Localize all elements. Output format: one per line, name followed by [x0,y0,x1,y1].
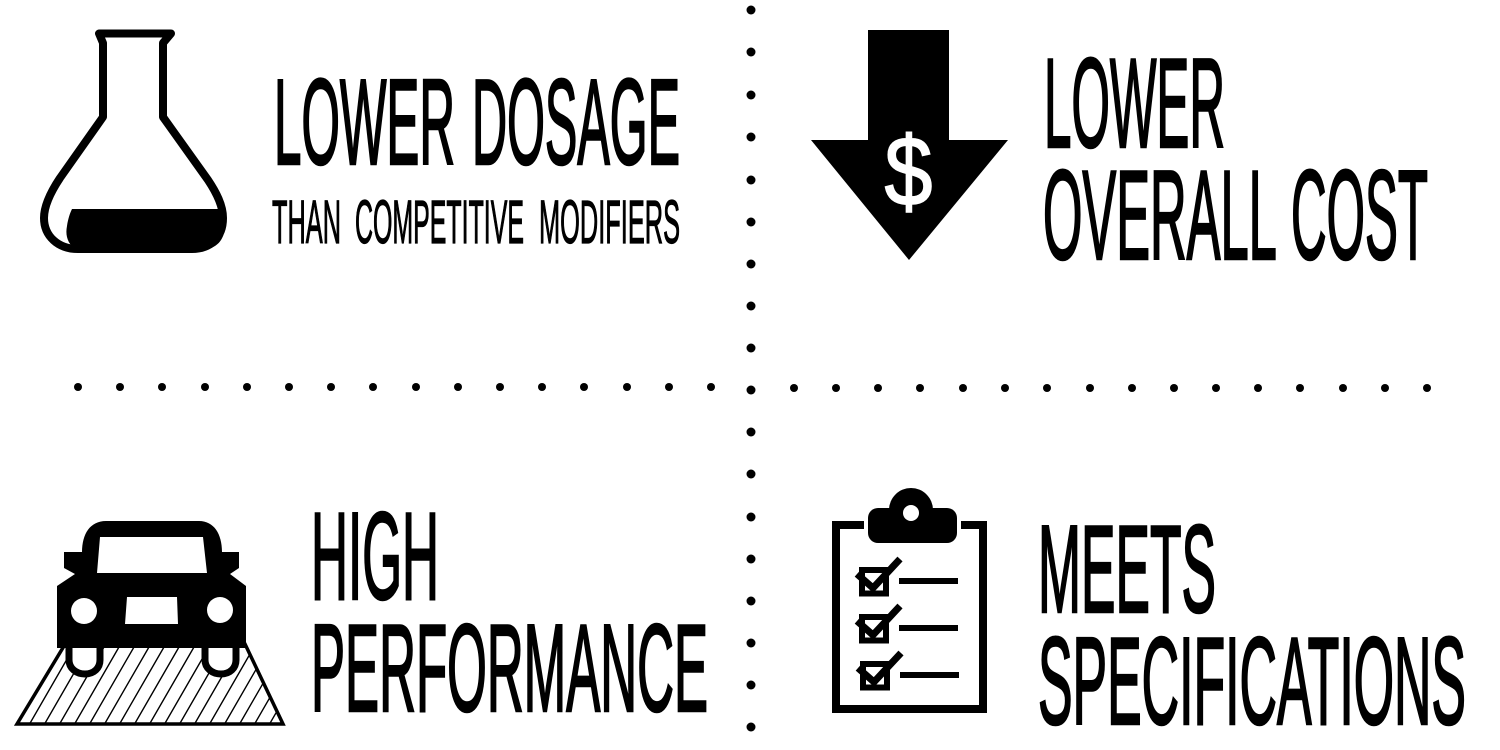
road with hatching [17,644,314,725]
headlights [71,597,233,624]
car body [57,521,246,648]
panel: meets specifications: MEETS [1038,501,1216,639]
panel: lower overall cost [811,30,1428,286]
panel: lower overall cost: LOWER [1044,32,1225,174]
infographic canvas: DOSAGE [472,54,680,190]
icon: flask [44,34,224,250]
dotted divider: horizontal [74,383,1431,392]
dotted divider: vertical [746,6,756,732]
icon: car on road [17,521,314,725]
icon: down arrow with dollar sign: $ [884,116,932,226]
panel: high performance: HIGH [311,488,439,626]
panel: high performance [14,510,706,726]
wheels [69,645,236,674]
heading: lower dosage: LOWER [274,54,455,190]
infographic canvas: MODIFIERS [539,188,680,256]
subheading: than competitive modifiers: THAN [272,188,341,256]
icon: clipboard checklist [836,488,983,709]
panel: lower dosage [44,34,680,256]
infographic canvas: PERFORMANCE [311,600,708,738]
subheading: than competitive modifiers: COMPETITIVE [355,188,524,256]
icon: down arrow with dollar sign [811,30,1008,260]
panel: meets specifications [836,488,1466,750]
